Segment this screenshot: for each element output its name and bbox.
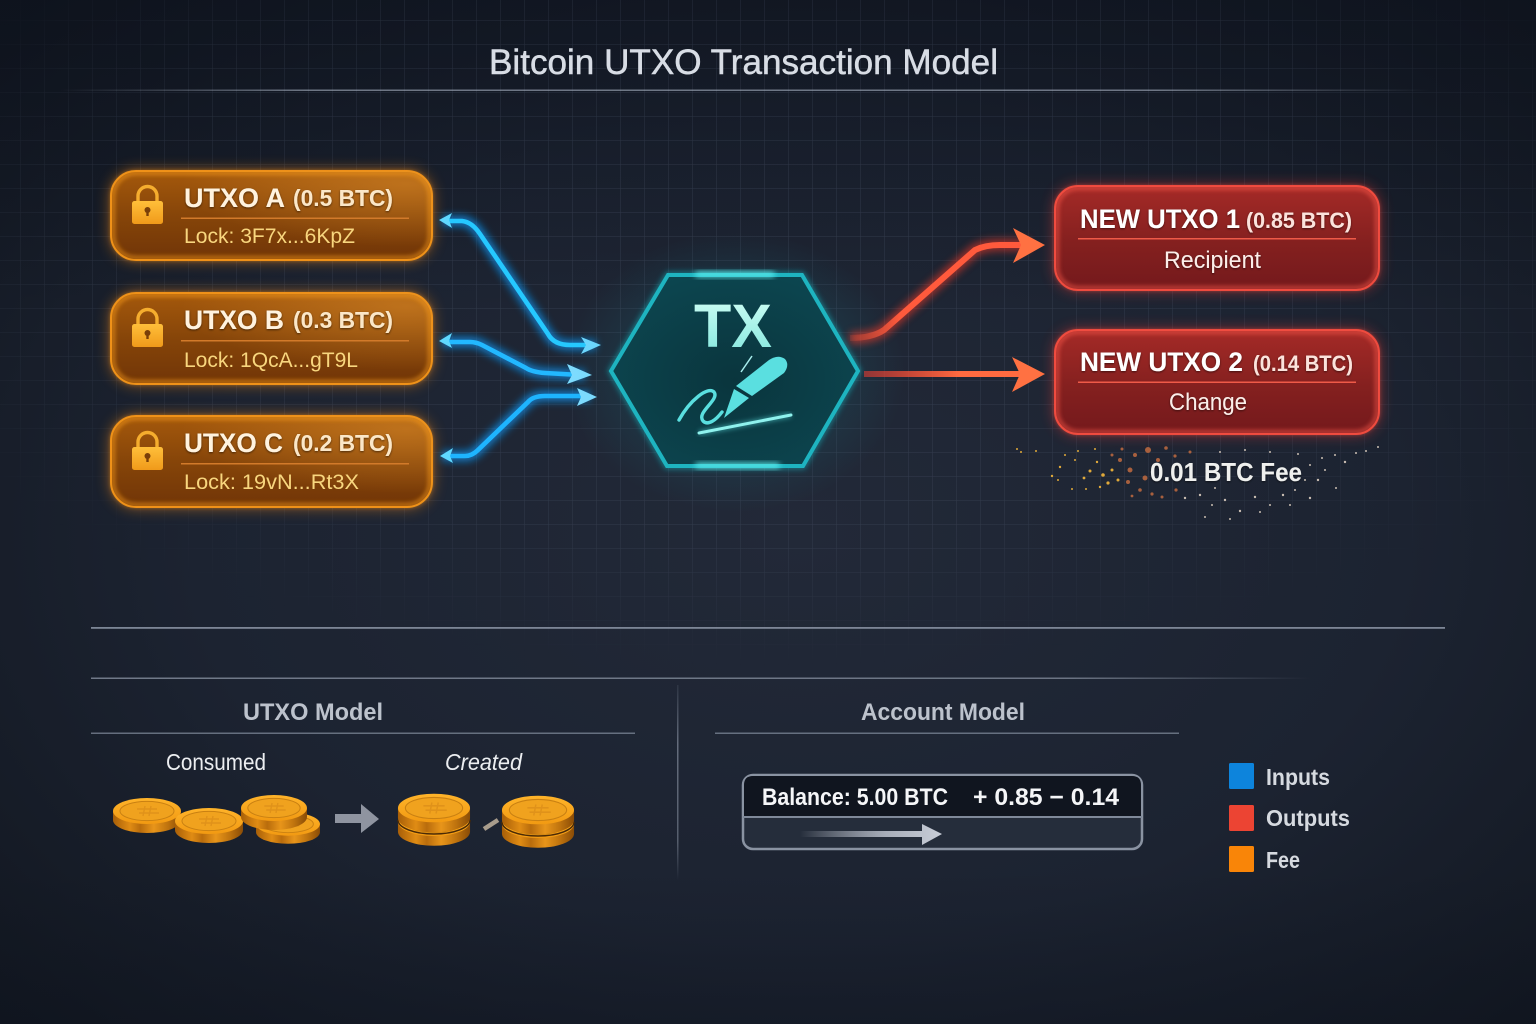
label: consumed: Consumed <box>166 749 266 775</box>
heading: NEW UTXO 1: NEW UTXO 1 <box>1080 204 1240 234</box>
legend <box>1229 763 1350 873</box>
label: created: Created <box>445 749 523 775</box>
TX label: TX <box>694 292 772 360</box>
lock address B: Lock: 1QcA...gT9L <box>184 349 358 372</box>
heading: UTXO C: (0.2 BTC) <box>293 430 393 456</box>
heading: NEW UTXO 2: NEW UTXO 2 <box>1080 347 1243 377</box>
icon: padlock B <box>132 310 163 347</box>
panel: input UTXO A <box>110 170 433 261</box>
upper rule of comparison section <box>91 678 1311 679</box>
panel: input UTXO B <box>110 292 433 385</box>
heading: UTXO B: UTXO B <box>184 305 284 335</box>
lock address C: Lock: 19vN...Rt3X <box>184 471 359 494</box>
arrow: UTXO C to TX <box>440 388 597 463</box>
heading: UTXO C <box>184 428 393 458</box>
heading: NEW UTXO 1: (0.85 BTC) <box>1246 208 1352 233</box>
panel: UTXO model <box>91 699 635 848</box>
icon: consumed coins <box>113 795 320 844</box>
balance text: + 0.85 − 0.14 <box>973 784 1120 811</box>
legend: outputs: Outputs <box>1266 805 1350 831</box>
panel: input UTXO C <box>110 415 433 508</box>
heading: NEW UTXO 2 <box>1080 347 1353 377</box>
section divider <box>91 627 1445 629</box>
arrow: UTXO A to TX <box>439 213 601 354</box>
icon: padlock A <box>132 186 163 224</box>
heading: UTXO B <box>184 305 393 335</box>
heading: Account Model: Account Model <box>861 699 1025 726</box>
arrow: TX to new UTXO 2 <box>864 357 1045 392</box>
heading: NEW UTXO 2: (0.14 BTC) <box>1253 351 1353 376</box>
heading: UTXO Model: UTXO Model <box>243 699 383 726</box>
panel: new UTXO 1 <box>1054 185 1380 291</box>
arrow: TX to new UTXO 1 <box>850 228 1045 338</box>
legend: fee: Fee <box>1266 847 1300 873</box>
icon: created coin stack one <box>398 794 470 846</box>
vertical separator <box>677 685 678 880</box>
heading: UTXO A <box>184 183 393 213</box>
icon: created coin stack two <box>502 796 574 848</box>
TX hexagon <box>565 232 905 512</box>
heading: UTXO A: (0.5 BTC) <box>293 185 393 211</box>
heading: NEW UTXO 1 <box>1080 204 1352 234</box>
lock address A: Lock: 3F7x...6KpZ <box>184 225 355 248</box>
panel: new UTXO 2 <box>1054 329 1380 435</box>
heading: UTXO A: UTXO A <box>184 183 285 213</box>
heading: UTXO C: UTXO C <box>184 428 283 458</box>
legend: inputs: Inputs <box>1266 764 1330 790</box>
arrow: consumed to created <box>335 804 379 833</box>
arrow: balance flow <box>800 824 942 845</box>
arrow: UTXO B to TX <box>439 333 592 384</box>
balance text <box>762 784 1120 811</box>
panel: account model <box>715 699 1179 849</box>
plus mark between stacks <box>484 820 498 829</box>
fee particles <box>1016 446 1379 520</box>
balance text: Balance: 5.00 BTC <box>762 784 948 811</box>
heading: UTXO B: (0.3 BTC) <box>293 307 393 333</box>
balance box <box>743 775 1142 849</box>
label: change: Change <box>1169 389 1247 416</box>
fee label: 0.01 BTC Fee <box>1150 457 1302 487</box>
label: recipient: Recipient <box>1164 247 1261 274</box>
icon: padlock C <box>132 433 163 470</box>
icon: pen signing <box>679 356 791 433</box>
title: Bitcoin UTXO Transaction Model <box>489 43 998 82</box>
